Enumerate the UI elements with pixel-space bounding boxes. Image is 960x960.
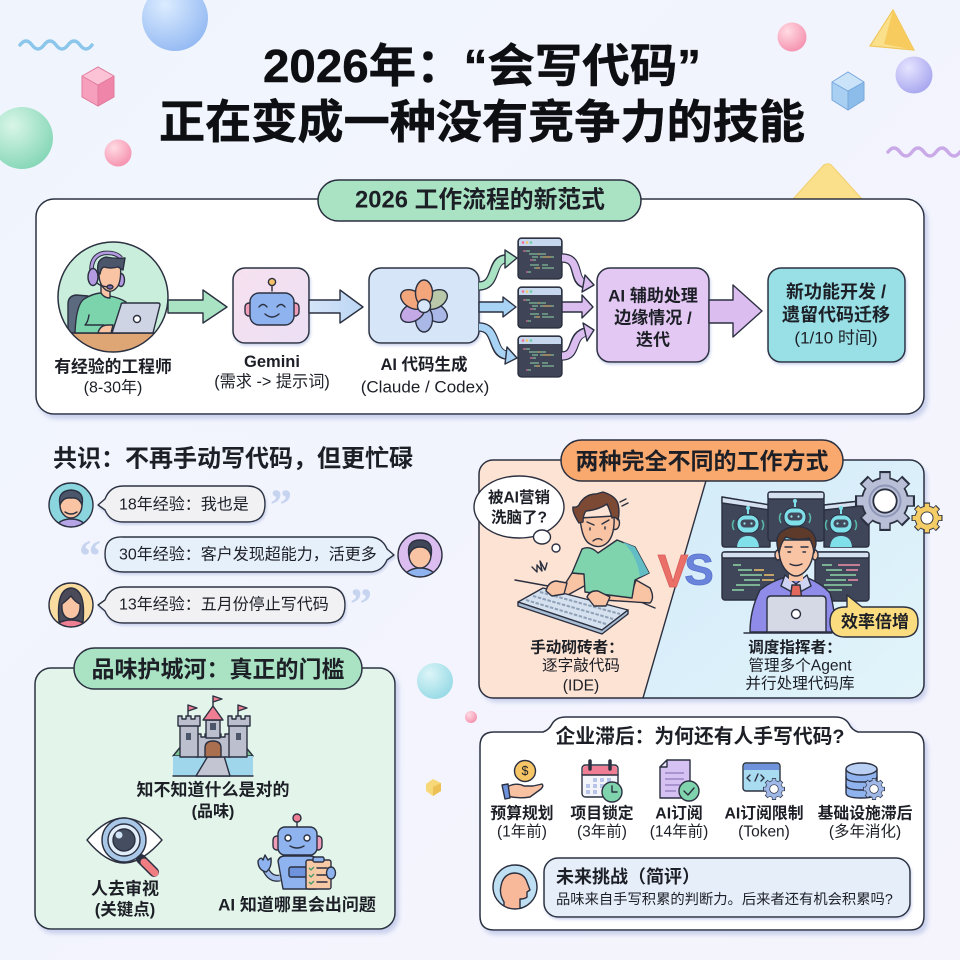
thought bubble: 洗脑了? bbox=[491, 508, 547, 526]
icon: small gear bbox=[912, 502, 942, 534]
icon: budget hand with coin bbox=[502, 760, 543, 799]
label: orchestrator: 并行处理代码库 bbox=[745, 674, 855, 692]
label: engineer bbox=[54, 356, 172, 396]
icon: database with gear bbox=[846, 763, 885, 800]
label: orchestrator: 管理多个Agent bbox=[748, 656, 852, 674]
label: engineer: 有经验的工程师 bbox=[54, 356, 172, 376]
box: future challenge: 未来挑战（简评） bbox=[556, 866, 700, 887]
VS mark: S bbox=[684, 546, 714, 594]
label: human review: (关键点) bbox=[95, 900, 155, 919]
monitor: robot right bbox=[824, 500, 869, 547]
box: AI assisted iteration: 边缘情况 / bbox=[614, 308, 692, 328]
icon: subscription document bbox=[660, 760, 699, 801]
heading pill: taste moat: 品味护城河：真正的门槛 bbox=[92, 656, 344, 682]
icon: code window with gear bbox=[743, 763, 785, 800]
monitor: code left bbox=[722, 552, 790, 600]
bubble: 30 years: 30年经验：客户发现超能力，活更多 bbox=[119, 546, 377, 564]
label: knowing what's right: (品味) bbox=[192, 802, 234, 820]
label: AI subscription bbox=[650, 804, 708, 840]
label: AI subscription: AI订阅 bbox=[655, 804, 703, 822]
monitor: robot centre bbox=[768, 492, 824, 541]
label: budget bbox=[490, 804, 554, 840]
bubble: 13 years: 13年经验：五月份停止写代码 bbox=[119, 596, 329, 614]
icon: head silhouette bbox=[493, 865, 537, 910]
quote mark: ” bbox=[270, 480, 292, 530]
label: subscription limits: (Token) bbox=[738, 824, 790, 840]
label: human review: 人去审视 bbox=[91, 878, 159, 898]
VS mark bbox=[658, 545, 714, 597]
label: AI code generation: AI 代码生成 bbox=[380, 354, 468, 374]
avatar: 13 years bbox=[48, 582, 94, 628]
label: AI code generation bbox=[361, 354, 489, 396]
label: infrastructure lag bbox=[818, 804, 913, 840]
icon: budget hand with coin: $ bbox=[522, 764, 529, 778]
label: project lock: (3年前) bbox=[577, 822, 627, 840]
decorative shapes, middle bbox=[417, 663, 477, 796]
label: orchestrator: 调度指挥者： bbox=[748, 638, 842, 656]
avatar: 18 years bbox=[48, 482, 94, 528]
heading pill: two ways bbox=[561, 440, 843, 481]
label: budget: 预算规划 bbox=[490, 804, 554, 822]
avatar: 30 years bbox=[397, 532, 443, 578]
right half background bbox=[643, 460, 924, 698]
panel: taste moat bbox=[35, 648, 395, 929]
heading pill: workflow: 2026 工作流程的新范式 bbox=[355, 186, 605, 214]
monitor: code right bbox=[815, 552, 869, 601]
panel: 2026 workflow bbox=[36, 180, 924, 414]
icon: robot with clipboard bbox=[258, 814, 336, 889]
heading pill: taste moat bbox=[74, 648, 362, 689]
bubble: 30 years bbox=[105, 537, 394, 572]
label: knowing what's right bbox=[136, 780, 290, 820]
arrows: code windows to AI assist bbox=[562, 258, 594, 356]
label: subscription limits: AI订阅限制 bbox=[724, 804, 804, 822]
title: 2026年：“会写代码” bbox=[263, 40, 701, 92]
label: manual coder bbox=[530, 638, 624, 694]
monitor: robot left bbox=[722, 497, 770, 547]
code windows bbox=[518, 238, 562, 377]
heading pill: workflow bbox=[318, 180, 641, 221]
icon: castle bbox=[173, 696, 253, 776]
bubble: 18 years: 18年经验：我也是 bbox=[119, 496, 249, 514]
bubble: 18 years bbox=[98, 486, 265, 522]
label: orchestrator bbox=[745, 638, 855, 692]
illustration: frustrated coder bbox=[515, 492, 655, 634]
box: future challenge: 品味来自手写积累的判断力。后来者还有机会积累吗? bbox=[556, 891, 893, 908]
box: AI assisted iteration: 迭代 bbox=[636, 330, 670, 350]
label: infrastructure lag: (多年消化) bbox=[829, 822, 901, 840]
icon: calendar with clock bbox=[582, 761, 622, 802]
callout: efficiency bbox=[830, 595, 918, 637]
arrow: Gemini to code generation bbox=[309, 290, 363, 323]
label: budget: (1年前) bbox=[497, 822, 547, 840]
illustration: agent monitors bbox=[722, 492, 869, 601]
label: Gemini: Gemini bbox=[244, 353, 300, 371]
box: AI assisted iteration bbox=[597, 268, 709, 362]
label: project lock: 项目锁定 bbox=[570, 804, 634, 822]
label: knowing what's right: 知不知道什么是对的 bbox=[136, 780, 290, 800]
title: 正在变成一种没有竞争力的技能 bbox=[159, 96, 805, 148]
box: AI assisted iteration: AI 辅助处理 bbox=[608, 286, 698, 306]
label: engineer: (8-30年) bbox=[84, 378, 142, 396]
label: manual coder: (IDE) bbox=[563, 678, 599, 694]
label: Gemini: (需求 -> 提示词) bbox=[214, 373, 330, 391]
title bbox=[159, 40, 805, 148]
icon: AI code generation box bbox=[369, 268, 479, 343]
icon: engineer bbox=[56, 242, 170, 355]
arrows: fan out to code windows bbox=[479, 250, 517, 364]
label: human review bbox=[91, 878, 159, 919]
decorative shapes, top left bbox=[0, 0, 208, 169]
thought bubble bbox=[474, 476, 564, 552]
box: result: 新功能开发 / bbox=[786, 281, 886, 302]
box: future challenge bbox=[544, 858, 910, 917]
panel: two ways of working bbox=[474, 440, 942, 698]
VS mark: V bbox=[658, 545, 689, 597]
quote mark: “ bbox=[79, 532, 101, 580]
decorative shapes, top right bbox=[778, 10, 960, 199]
label: AI subscription: (14年前) bbox=[650, 822, 708, 840]
icon: eye with magnifier bbox=[87, 818, 162, 873]
label: Gemini bbox=[214, 353, 330, 391]
arrow: engineer to Gemini bbox=[168, 290, 227, 323]
icon: Gemini robot box bbox=[233, 268, 309, 343]
label: manual coder: 逐字敲代码 bbox=[542, 656, 620, 674]
quote mark: ” bbox=[350, 580, 372, 628]
label: AI code generation: (Claude / Codex) bbox=[361, 378, 489, 396]
box: result: 遗留代码迁移 bbox=[782, 304, 890, 325]
heading: consensus: 共识：不再手动写代码，但更忙碌 bbox=[53, 446, 413, 472]
label: manual coder: 手动砌砖者： bbox=[530, 638, 624, 656]
label: infrastructure lag: 基础设施滞后 bbox=[818, 804, 913, 822]
thought bubble: 被AI营销 bbox=[488, 488, 550, 506]
icon: big gear bbox=[855, 471, 915, 531]
box: result: (1/10 时间) bbox=[794, 328, 878, 348]
label: project lock bbox=[570, 804, 634, 840]
heading pill: two ways: 两种完全不同的工作方式 bbox=[576, 448, 828, 474]
callout: efficiency: 效率倍增 bbox=[841, 612, 909, 632]
heading: enterprise lag: 企业滞后：为何还有人手写代码? bbox=[555, 725, 845, 748]
box: result bbox=[768, 268, 905, 362]
label: subscription limits bbox=[724, 804, 804, 840]
panel: enterprise lag bbox=[480, 717, 924, 930]
arrow: AI assist to result bbox=[709, 285, 762, 337]
bubble: 13 years bbox=[98, 587, 345, 623]
label: AI knows problems: AI 知道哪里会出问题 bbox=[218, 894, 376, 914]
illustration: conductor bbox=[744, 527, 836, 633]
